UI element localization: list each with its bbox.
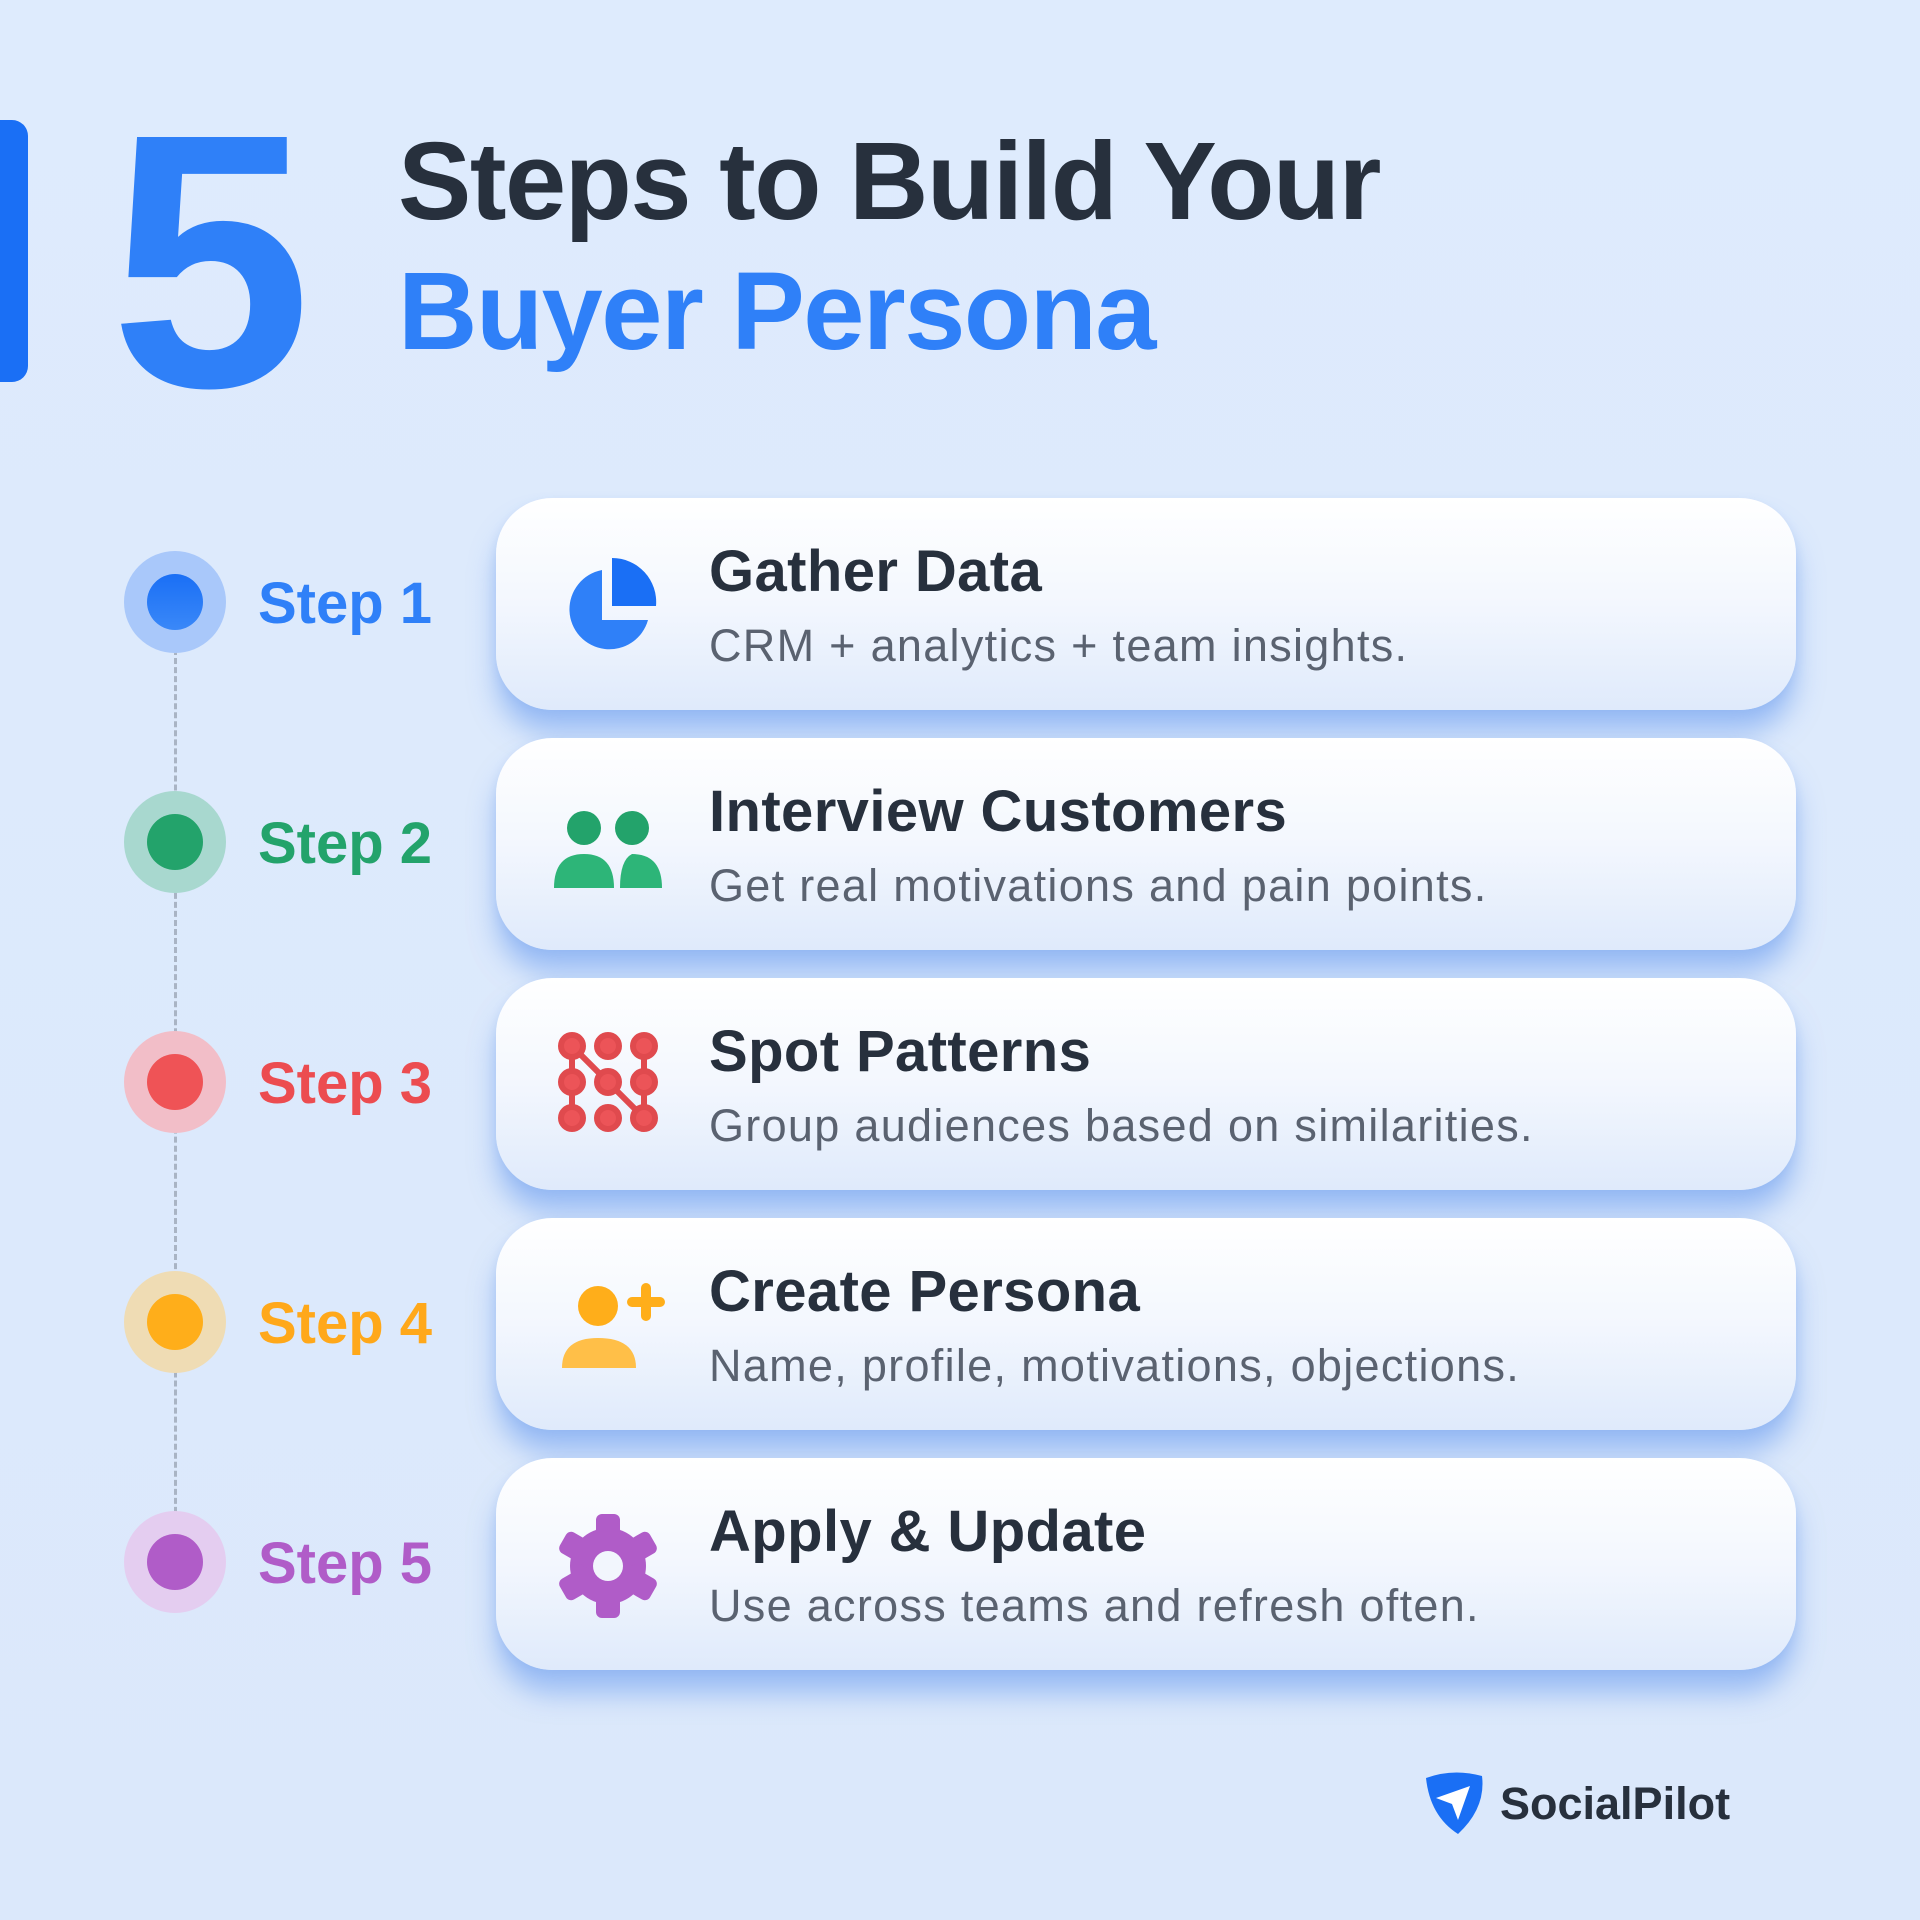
timeline dashed line [174,640,177,1540]
card: create persona [496,1218,1796,1430]
description: Name, profile, motivations, objections. [709,1340,1520,1391]
card: gather data [496,498,1796,710]
title: Buyer Persona [398,250,1155,373]
step 3 marker [124,1031,226,1133]
step 1 marker [124,551,226,653]
title: Steps to Build Your [398,120,1380,243]
step 1 label: Step 1 [258,571,432,636]
description: Use across teams and refresh often. [709,1580,1480,1631]
description: Get real motivations and pain points. [709,860,1488,911]
step 5 marker [124,1511,226,1613]
icon: pattern network [558,1032,658,1132]
heading: Gather Data [709,539,1042,604]
left accent bar [0,120,28,382]
card: spot patterns [496,978,1796,1190]
card: interview customers [496,738,1796,950]
heading: Apply & Update [709,1499,1146,1564]
brand name: SocialPilot [1500,1778,1730,1829]
icon: people [554,811,662,888]
logo: SocialPilot [1426,1772,1730,1834]
step 2 label: Step 2 [258,811,432,876]
icon: paper plane shield [1426,1772,1482,1834]
description: CRM + analytics + team insights. [709,620,1408,671]
step 4 marker [124,1271,226,1373]
title [398,120,1380,373]
heading: Spot Patterns [709,1019,1091,1084]
icon: gear [559,1514,657,1618]
step 5 label: Step 5 [258,1531,432,1596]
step 2 marker [124,791,226,893]
card: apply & update [496,1458,1796,1670]
icon: add user [562,1283,665,1368]
description: Group audiences based on similarities. [709,1100,1534,1151]
step 3 label: Step 3 [258,1051,432,1116]
heading: Interview Customers [709,779,1287,844]
step 4 label: Step 4 [258,1291,432,1356]
big number 5: 5 [110,58,311,463]
icon: pie chart [569,558,656,650]
heading: Create Persona [709,1259,1140,1324]
